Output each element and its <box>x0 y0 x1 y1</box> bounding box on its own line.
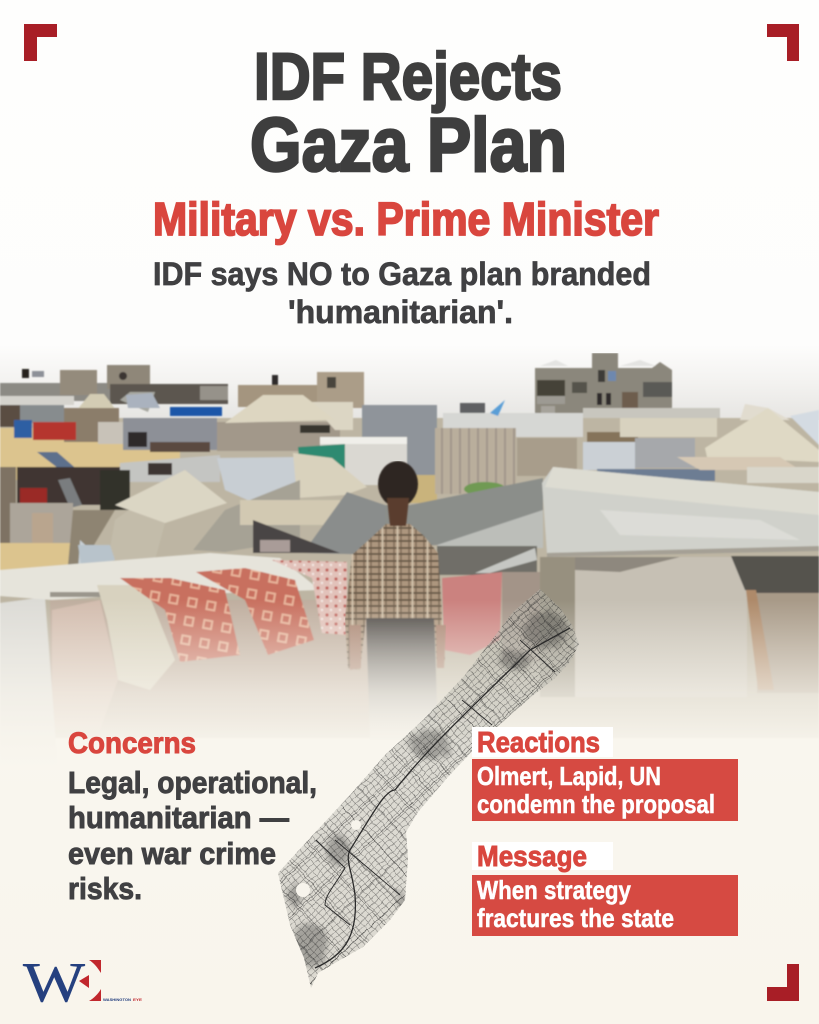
body: concerns text: Legal, operational, <box>68 765 317 800</box>
foreground left tent <box>50 600 370 730</box>
body: concerns text: even war crime <box>68 836 276 871</box>
panel: Message: When strategy <box>477 875 631 905</box>
subheading: IDF says NO to Gaza plan branded <box>153 256 651 292</box>
title <box>250 39 567 188</box>
ground fade <box>0 600 819 770</box>
right wall below tarp <box>540 557 576 697</box>
icon: floral blanket <box>272 560 347 635</box>
panel: Message: fractures the state <box>477 903 674 933</box>
heading: Concerns: Concerns <box>68 727 196 760</box>
mid row left <box>37 452 80 472</box>
subheading <box>153 256 651 330</box>
icon: second red patterned blanket <box>196 568 314 655</box>
body: concerns text: risks. <box>68 871 142 906</box>
icon: big white tarp <box>542 467 819 557</box>
title: Gaza Plan <box>250 103 567 188</box>
panel: Reactions: condemn the proposal <box>477 789 715 819</box>
panel: Reactions <box>472 727 738 821</box>
heading: Military vs. Prime Minister: Military vs. Prime Minister <box>153 193 659 245</box>
body: concerns text <box>68 765 317 906</box>
title: IDF Rejects <box>254 39 562 113</box>
panel: Message <box>472 841 738 936</box>
icon: damaged building on right <box>535 353 720 418</box>
icon: cream blanket <box>97 585 175 690</box>
panel: photo of tent camp with boy <box>0 345 819 770</box>
map of Gaza Strip <box>270 580 590 995</box>
icon: blue tarp and containers <box>14 393 222 452</box>
subheading: 'humanitarian'. <box>288 294 513 330</box>
logo: Washington Eye: WASHINGTON <box>103 997 131 1002</box>
logo: Washington Eye: W <box>23 952 85 1014</box>
icon: red patterned blanket <box>120 578 240 662</box>
icon: boy seen from behind <box>345 461 446 740</box>
logo: Washington Eye: EYE <box>133 997 142 1002</box>
icon: tan tent <box>217 395 353 451</box>
icon: central building <box>238 372 364 408</box>
panel: Message: Message <box>477 841 587 873</box>
icon: hanging red blankets <box>442 572 502 655</box>
gray tarp <box>380 478 543 548</box>
icon: corrugated wall <box>435 428 516 496</box>
panel: Reactions: Olmert, Lapid, UN <box>477 761 661 791</box>
corner bracket: top left <box>24 24 57 61</box>
panel: Reactions: Reactions <box>477 727 600 759</box>
icon: right tent <box>705 408 819 462</box>
logo: Washington Eye <box>23 952 142 1014</box>
text block: Concerns <box>68 727 317 906</box>
corner bracket: top right <box>767 24 799 61</box>
body: concerns text: humanitarian — <box>68 800 289 835</box>
corner bracket: bottom right <box>767 964 799 1001</box>
icon: far left buildings <box>0 365 228 442</box>
